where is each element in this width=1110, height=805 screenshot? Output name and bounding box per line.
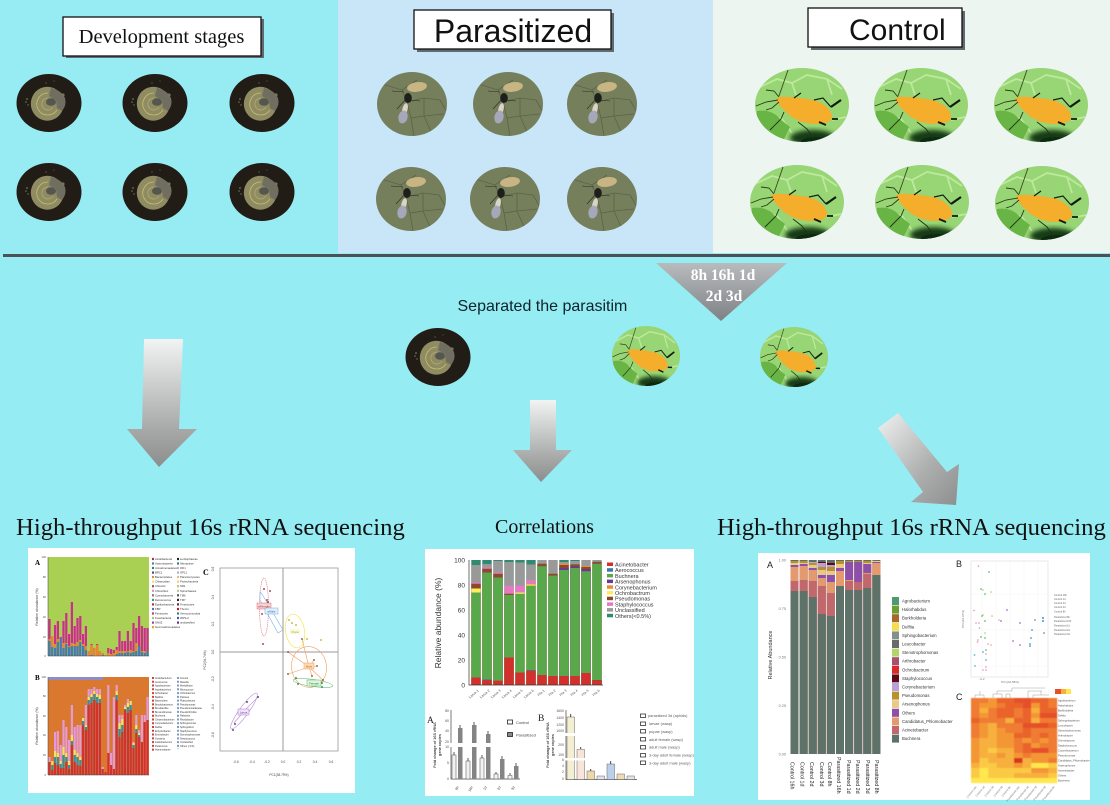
- chart: fold change B: adult male (wasp): [649, 744, 680, 750]
- chart: PCA scatter C: 0.0: [281, 760, 285, 764]
- legend: bacterial genera: Arthrobacter: [902, 659, 926, 664]
- callout: time points triangle: [656, 263, 787, 321]
- legend: phyla: Deinococcus: [155, 598, 172, 602]
- legend: genera: Sphingomonas: [180, 722, 197, 725]
- chart: heatmap C: Arthrobacter: [1058, 734, 1073, 738]
- chart: fold change B: [538, 709, 694, 781]
- chart: PCA scatter C: C: [203, 568, 209, 577]
- chart: stacked bars A: 40: [43, 615, 46, 619]
- legend: genera: Acidobacterium: [155, 677, 171, 680]
- icon: separated larva: [406, 328, 470, 386]
- chart: stacked bars B: 60: [43, 714, 46, 718]
- chart: relative abundance bars: 0.00: [779, 752, 786, 756]
- chart: stacked bars B: 0: [44, 773, 46, 777]
- chart: fold change B: adult female (wasp): [649, 737, 684, 742]
- chart: fold change A: 5: [447, 761, 449, 765]
- chart: PCA scatter C: PC1(38.79%): [269, 773, 289, 777]
- chart: stacked bars A: 20: [43, 635, 46, 639]
- legend: bacterial genera: Agrobacterium: [902, 598, 930, 604]
- legend: abundance taxa: Ochrobactrum: [615, 591, 650, 597]
- chart: relative abundance bars: Parasitized 2d: [854, 760, 860, 794]
- chart: stacked abundance bars: Relative abundance (%): [433, 577, 443, 668]
- chart: fold change B: 2: [562, 770, 564, 774]
- legend: genera: Brevibacillus: [155, 707, 169, 710]
- chart: relative abundance bars: Control 3d: [818, 762, 824, 786]
- legend: bacterial genera: Acinetobacter: [902, 728, 929, 732]
- chart: PCoA scatter B: Parasitized 2d: [1054, 629, 1070, 632]
- chart: fold change B: larvae (wasp): [649, 721, 673, 726]
- chart: fold change A: A: [427, 716, 434, 726]
- legend: phyla: OP11: [180, 571, 187, 575]
- legend: bacterial genera: Arsenophonus: [902, 702, 930, 707]
- chart: stacked abundance bars: 20: [458, 658, 465, 664]
- chart: stacked abundance bars: Larva 4: [501, 689, 513, 699]
- legend: phyla: TM6: [180, 593, 186, 597]
- chart: heatmap C: Delftia: [1058, 714, 1066, 718]
- chart: fold change B: 3-day adult male (wasp): [649, 760, 691, 766]
- chart: stacked bars A: 80: [43, 575, 46, 579]
- chart: stacked abundance bars: Pta 3: [559, 689, 568, 697]
- chart: heatmap C: Agrobacterium: [1058, 698, 1076, 702]
- chart: fold change B: pupae (wasp): [649, 729, 673, 734]
- heading: development stages: Development stages: [79, 26, 244, 48]
- legend: abundance taxa: Buchnera: [615, 574, 639, 580]
- legend: genera: Streptococcus: [180, 737, 196, 740]
- legend: phyla: Chlorobi: [155, 584, 166, 588]
- chart: PCoA scatter B: Control 3d: [1054, 606, 1066, 609]
- legend: genera: Aerococcus: [155, 681, 168, 684]
- legend: genera: Bacteroides: [155, 700, 168, 703]
- chart: fold change B: 1000: [556, 729, 564, 733]
- chart: fold change B: 0: [562, 777, 564, 781]
- icons: yellow aphids: [749, 67, 1090, 245]
- legend: bacterial genera: Staphylococcus: [902, 676, 932, 681]
- chart: fold change B: 1400: [556, 716, 564, 720]
- chart: fold change B: parasitized 3d (aphids): [648, 713, 688, 718]
- chart: fold change A: 40: [445, 729, 449, 733]
- legend: phyla: Gemmatimonadetes: [155, 625, 181, 629]
- panel: right figure: [758, 553, 1090, 802]
- chart: PCoA scatter B: Control 1d: [1054, 598, 1066, 601]
- chart: stacked bars A: 0: [44, 654, 46, 658]
- legend: bacterial genera: Delftia: [902, 624, 915, 629]
- chart: fold change A: 16h: [467, 785, 474, 793]
- chart: PCA scatter C: -0.2: [211, 676, 215, 682]
- legend: genera: Pseudomonadaceae: [180, 707, 203, 710]
- legend: genera: Stenotrophomonas: [180, 734, 201, 736]
- legend: genera: Brevundimonas: [155, 711, 172, 714]
- chart: heatmap C: Others: [1058, 774, 1067, 778]
- icons: wasp on leaf: [375, 71, 638, 232]
- chart: PCA scatter C: 0.2: [211, 622, 215, 626]
- chart: PCA scatter C: 0.6: [211, 567, 215, 571]
- chart: fold change A: Fold change of 16S rRNA: [433, 722, 437, 768]
- legend: genera: Hymenobacter: [155, 749, 171, 752]
- text: separated the parasitim: Separated the parasitim: [458, 298, 627, 315]
- chart: PCoA scatter B: PC2(18.97%): [961, 610, 965, 628]
- legend: bacterial genera: [892, 597, 953, 743]
- chart: fold change A: [427, 709, 536, 793]
- chart: fold change B: 4: [562, 764, 564, 768]
- chart: heatmap C: Parasitized 16h: [1005, 785, 1021, 802]
- arrow: left down: [127, 339, 197, 467]
- chart: PCA scatter C: Pupa: [291, 630, 299, 634]
- chart: PCoA scatter B: Parasitized 1d: [1054, 624, 1070, 628]
- chart: fold change B: Fold change of 16S rRNA: [546, 722, 550, 768]
- legend: phyla: Epsilonbacteria: [155, 602, 175, 606]
- chart: fold change B: 3-day adult female (wasp): [649, 752, 694, 758]
- heading: parasitized: Parasitized: [434, 13, 592, 49]
- chart: heatmap C: Control 16h: [965, 785, 978, 799]
- legend: phyla: GN02: [155, 621, 163, 625]
- chart: stacked bars B: [35, 674, 149, 777]
- chart: fold change B: gene copies: [551, 734, 555, 756]
- chart: heatmap C: Staphylococcus: [1058, 744, 1077, 748]
- legend: phyla: Proteobacteria: [180, 580, 199, 584]
- legend: abundance taxa: Arsenophonus: [615, 580, 651, 586]
- chart: fold change A: gene copies: [438, 734, 442, 756]
- chart: fold change A: 60: [445, 719, 449, 723]
- chart: stacked abundance bars: Pta 1: [537, 689, 546, 697]
- chart: PCA scatter C: aMale: [267, 610, 276, 614]
- chart: fold change A: 20: [445, 740, 449, 744]
- callout: time points triangle: 8h 16h 1d: [691, 267, 756, 284]
- chart: stacked abundance bars: Pta 2: [548, 689, 557, 697]
- chart: heatmap C: Buchnera: [1058, 778, 1070, 782]
- chart: heatmap C: Ochrobactrum: [1058, 738, 1076, 742]
- heading: control: Control: [849, 14, 946, 47]
- legend: genera: Ochrobactrum: [180, 692, 195, 695]
- legend: genera: Enterobacter: [155, 734, 169, 736]
- chart: fold change B: 1600: [556, 709, 564, 713]
- chart: stacked abundance bars: Larva 2: [479, 689, 491, 699]
- chart: heatmap C: Leucobacter: [1058, 724, 1073, 728]
- chart: stacked bars A: 60: [43, 595, 46, 599]
- chart: heatmap C: Acinetobacter: [1058, 768, 1075, 772]
- chart: stacked abundance bars: Larva 3: [490, 689, 502, 699]
- heading: parasitized: [414, 10, 614, 52]
- arrow: right diagonal: [878, 413, 959, 505]
- chart: heatmap C: Parasitized 2d: [1023, 785, 1038, 801]
- chart: heatmap C: Control 8h: [1000, 785, 1012, 798]
- legend: abundance taxa: Unclassified: [615, 608, 645, 614]
- chart: stacked bars B: 100: [41, 675, 46, 679]
- chart: relative abundance bars: 0.25: [779, 704, 786, 708]
- chart: stacked abundance bars: 100: [454, 558, 465, 564]
- chart: fold change A: 8h: [454, 785, 460, 791]
- chart: PCoA scatter B: PC1(42.58%): [1001, 680, 1019, 684]
- heading: control: [808, 8, 965, 50]
- chart: PCoA scatter B: -0.2: [979, 677, 985, 681]
- legend: phyla: Actinobacteria: [155, 562, 173, 566]
- chart: fold change A: Control: [516, 720, 529, 725]
- legend: abundance taxa: Corynebacterium: [615, 585, 657, 591]
- icon: separated aphid 2: [759, 326, 829, 391]
- legend: phyla: Thermi: [180, 607, 189, 611]
- chart: PCA scatter C: -0.6: [211, 732, 215, 738]
- chart: heatmap C: Parasitized 3d: [1032, 785, 1047, 801]
- chart: stacked bars B: 20: [43, 753, 46, 757]
- legend: bacterial genera: Others: [902, 710, 915, 715]
- heading: correlations: Correlations: [495, 516, 594, 538]
- legend: genera: Pseudomonas: [180, 703, 196, 706]
- chart: PCoA scatter B: Control 8h: [1054, 610, 1066, 614]
- chart: PCA scatter C: 0.0: [211, 650, 215, 654]
- legend: genera: Kaistobacterium: [155, 741, 172, 744]
- chart: PCoA scatter B: Parasitized 16h: [1054, 620, 1072, 623]
- legend: abundance taxa: Staphylococcus: [615, 602, 654, 608]
- legend: phyla: Fusobacteria: [155, 616, 172, 620]
- chart: stacked bars A: Relative abundance (%): [35, 588, 39, 626]
- legend: bacterial genera: Corynebacterium: [902, 684, 935, 690]
- legend: genera: Sphingobium: [180, 726, 194, 729]
- legend: phyla: Tenericutes: [180, 602, 195, 606]
- chart: heatmap C: Corynebacterium: [1058, 748, 1079, 752]
- chart: relative abundance bars: Control 1d: [798, 762, 804, 786]
- chart: relative abundance bars: Parasitized 1d: [845, 760, 851, 794]
- legend: genera: Massilia: [180, 681, 189, 684]
- chart: heatmap C: Control 2d: [983, 785, 995, 798]
- chart: heatmap C: [956, 688, 1090, 802]
- chart: relative abundance bars: [767, 558, 879, 794]
- legend: genera: Unclassified: [180, 741, 194, 744]
- chart: stacked abundance bars: Pta 4: [570, 689, 579, 697]
- legend: phyla: [152, 557, 201, 629]
- chart: stacked bars B: 40: [43, 733, 46, 737]
- heading: right sequencing: High-throughput 16s rRNA sequencing: [717, 514, 1106, 541]
- chart: relative abundance bars: Parasitized 16h: [835, 757, 841, 794]
- chart: heatmap C: Pseudomonas: [1058, 754, 1076, 758]
- legend: abundance taxa: Acinetobacter: [615, 562, 649, 568]
- chart: stacked bars B: B: [35, 674, 40, 682]
- chart: PCA scatter C: 0.4: [211, 595, 215, 599]
- chart: stacked abundance bars: Larva 1: [468, 689, 480, 699]
- legend: abundance taxa: Aerococcus: [615, 568, 644, 574]
- legend: phyla: Nitrospirae: [180, 562, 194, 566]
- legend: genera: Arthrobacter: [155, 692, 168, 695]
- chart: stacked bars B: 80: [43, 694, 46, 698]
- chart: PCA scatter C: 0.6: [329, 760, 333, 764]
- chart: PCA scatter C: -0.4: [249, 760, 255, 764]
- panel: development stages: [3, 0, 338, 253]
- legend: genera: Buchnera: [155, 715, 166, 718]
- chart: PCA scatter C: -0.4: [211, 704, 215, 710]
- legend: genera: Phascolarctos: [180, 700, 196, 703]
- icon: separated aphid 1: [611, 325, 681, 390]
- chart: fold change A: 0: [447, 777, 449, 781]
- chart: stacked abundance bars: Larva 6: [523, 689, 535, 699]
- legend: phyla: Chlamydiae: [155, 580, 170, 584]
- legend: phyla: OD1: [180, 566, 186, 570]
- legend: genera: Chryseobacterium: [155, 718, 174, 722]
- legend: phyla: Armatimonadetes: [155, 566, 178, 570]
- chart: stacked abundance bars: 60: [458, 608, 465, 614]
- chart: PCoA scatter B: Parasitized 3d: [1054, 633, 1070, 636]
- chart: relative abundance bars: 1.00: [779, 558, 786, 562]
- legend: genera: Brachybacterium: [155, 703, 173, 706]
- arrow: middle down: [513, 400, 572, 482]
- legend: abundance taxa: [607, 562, 657, 620]
- chart: fold change A: 10: [445, 745, 449, 749]
- legend: genera: Micrococcus: [180, 688, 194, 691]
- legend: phyla: TM7: [180, 598, 186, 602]
- legend: bacterial genera: Halorhabdus: [902, 607, 926, 612]
- legend: genera: Methylibium: [180, 685, 193, 688]
- legend: bacterial genera: Stenotrophomonas: [902, 650, 938, 655]
- legend: genera: [153, 677, 203, 752]
- legend: genera: Aquabacterium: [155, 688, 171, 691]
- panel: parasitized: [338, 0, 713, 253]
- legend: genera: Ralstonia: [180, 715, 191, 718]
- chart: fold change B: B: [538, 714, 544, 724]
- chart: stacked bars A: 100: [41, 555, 46, 559]
- chart: PCoA scatter B: B: [956, 559, 962, 569]
- chart: relative abundance bars: Parasitized 3d: [864, 760, 870, 794]
- chart: heatmap C: C: [956, 692, 963, 702]
- chart: stacked abundance bars: 0: [461, 682, 465, 690]
- chart: PCoA scatter B: Control 2d: [1054, 602, 1066, 605]
- legend: phyla: BRC1: [155, 571, 163, 575]
- legend: genera: Corynebacterium: [155, 722, 173, 725]
- panel: control: [713, 0, 1110, 253]
- legend: abundance taxa: Pseudomonas: [615, 597, 650, 603]
- chart: stacked abundance bars: 40: [458, 632, 465, 640]
- legend: bacterial genera: Candidatus_Phlomobacter: [902, 719, 953, 724]
- chart: heatmap C: Burkholderia: [1058, 708, 1074, 712]
- chart: PCA scatter C: aFemale: [258, 604, 270, 608]
- panel: left figure: [28, 548, 355, 793]
- chart: fold change A: 2d: [496, 785, 502, 791]
- chart: PCA scatter C: PC2(34.74%): [203, 650, 207, 670]
- chart: PCA scatter C: [203, 567, 338, 777]
- legend: bacterial genera: Buchnera: [902, 736, 921, 741]
- chart: fold change A: Parasitized: [516, 732, 536, 738]
- legend: phyla: Cyanobacteria: [155, 593, 173, 597]
- legend: bacterial genera: Sphingobacterium: [902, 633, 937, 638]
- chart: heatmap C: Parasitized 1d: [1015, 785, 1030, 801]
- chart: PCoA scatter B: [956, 559, 1072, 684]
- legend: bacterial genera: Pseudomonas: [902, 693, 929, 698]
- legend: phyla: Spirochaetes: [180, 589, 197, 593]
- icons: larva discs: [16, 74, 294, 221]
- chart: stacked bars B: Relative abundance (%): [35, 707, 39, 745]
- chart: relative abundance bars: 0.50: [779, 656, 786, 660]
- chart: stacked abundance bars: 80: [458, 582, 465, 590]
- chart: PCA scatter C: -0.6: [233, 760, 239, 764]
- chart: fold change B: 100: [558, 753, 564, 757]
- chart: PCoA scatter B: Parasitized 8h: [1054, 616, 1070, 619]
- chart: relative abundance bars: Control 8h: [826, 762, 832, 786]
- legend: genera: Pseudorhizobia: [180, 711, 197, 714]
- chart: heatmap C: Sphingobacterium: [1058, 718, 1080, 722]
- legend: genera: Others (<1%): [180, 745, 194, 748]
- legend: phyla: Bacteroidetes: [155, 575, 173, 579]
- chart: relative abundance bars: Control 2d: [808, 762, 814, 786]
- chart: relative abundance bars: Control 16h: [788, 762, 794, 789]
- chart: PCA scatter C: 0.2: [297, 760, 301, 764]
- legend: phyla: unclassified: [180, 621, 195, 625]
- chart: stacked bars A: [35, 555, 149, 658]
- legend: phyla: Lentisphaerae: [180, 557, 198, 561]
- chart: heatmap C: Halorhabdus: [1058, 704, 1074, 708]
- chart: PCA scatter C: Female: [309, 682, 319, 686]
- legend: genera: Rhodobacter: [180, 718, 194, 722]
- legend: phyla: Planctomycetes: [180, 575, 200, 579]
- chart: PCA scatter C: -0.2: [264, 760, 270, 764]
- chart: heatmap C: Stenotrophomonas: [1058, 728, 1081, 732]
- chart: fold change B: 200: [558, 743, 564, 747]
- legend: bacterial genera: Ochrobactrum: [902, 667, 930, 672]
- panel: middle figure: [425, 549, 694, 796]
- legend: genera: Staphylococcus: [180, 730, 198, 733]
- legend: genera: Kocuria: [180, 677, 189, 680]
- chart: PCoA scatter B: Control 16h: [1054, 594, 1068, 597]
- legend: phyla: Chloroflexi: [155, 589, 169, 593]
- legend: genera: Agrobacterium: [155, 685, 171, 688]
- chart: heatmap C: Arsenophonus: [1058, 764, 1076, 768]
- chart: fold change A: 1d: [482, 785, 488, 791]
- chart: fold change A: 3d: [510, 785, 516, 791]
- legend: genera: Gordonia: [155, 737, 166, 740]
- callout: time points triangle: 2d 3d: [706, 288, 743, 305]
- chart: heatmap C: Control 1d: [974, 785, 986, 798]
- chart: fold change A: 80: [445, 709, 449, 713]
- chart: heatmap C: Candidatus_Phlomobacter: [1058, 758, 1090, 762]
- legend: phyla: SR1: [180, 584, 186, 588]
- chart: heatmap C: Control 3d: [992, 785, 1004, 798]
- legend: genera: Delftia: [155, 726, 162, 729]
- chart: PCA scatter C: Larva: [240, 710, 248, 714]
- chart: stacked abundance bars: Pta 6: [592, 689, 601, 697]
- legend: phyla: Verrucomicrobia: [180, 612, 201, 616]
- legend: phyla: FBP: [155, 607, 161, 611]
- chart: heatmap C: Parasitized 8h: [1041, 785, 1056, 801]
- legend: bacterial genera: Burkholderia: [902, 616, 927, 621]
- chart: PCA scatter C: 0.4: [313, 760, 317, 764]
- legend: bacterial genera: Leucobacter: [902, 642, 926, 646]
- chart: stacked abundance bars: [433, 558, 603, 699]
- legend: phyla: WPS-2: [180, 616, 189, 620]
- chart: stacked bars A: A: [35, 559, 40, 567]
- chart: fold change B: 6: [562, 758, 564, 762]
- heading: left sequencing: High-throughput 16s rRNA sequencing: [16, 514, 405, 541]
- chart: relative abundance bars: 0.75: [779, 607, 786, 611]
- legend: genera: Pantoea: [180, 696, 190, 699]
- heading: development stages: [63, 17, 264, 58]
- legend: genera: Enhydrobacter: [155, 730, 171, 733]
- chart: relative abundance bars: A: [767, 560, 773, 570]
- legend: phyla: Firmicutes: [155, 612, 168, 616]
- chart: stacked abundance bars: Pta 5: [581, 689, 590, 697]
- legend: phyla: Acidobacteria: [155, 557, 172, 561]
- chart: fold change B: 1200: [556, 723, 564, 727]
- chart: relative abundance bars: Parasitized 8h: [873, 760, 879, 794]
- legend: abundance taxa: Others(<0.5%): [615, 614, 651, 620]
- chart: relative abundance bars: Relative Abundance: [768, 631, 774, 679]
- chart: PCA scatter C: Male: [306, 664, 313, 668]
- legend: genera: Bacillus: [155, 696, 164, 699]
- legend: genera: Paracoccus: [155, 745, 168, 748]
- chart: stacked abundance bars: Larva 5: [512, 689, 524, 699]
